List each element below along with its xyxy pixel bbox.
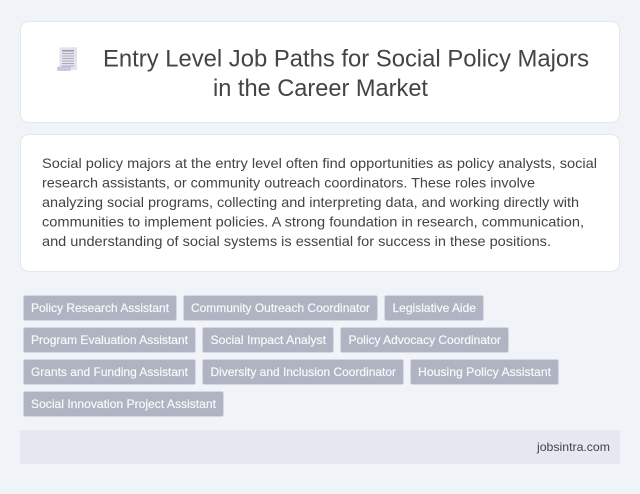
tag: Legislative Aide	[384, 296, 484, 320]
tag: Community Outreach Coordinator	[184, 296, 378, 320]
tag: Policy Advocacy Coordinator: Policy Advocacy Coordinator	[348, 333, 501, 347]
tag: Diversity and Inclusion Coordinator	[202, 360, 404, 384]
tag: Social Impact Analyst: Social Impact Analyst	[210, 333, 327, 347]
tag list	[24, 296, 558, 416]
heading: in the Career Market	[213, 75, 428, 102]
text block: summary paragraph: and understanding of social systems is essential for success in these positions.	[42, 233, 551, 249]
text block: summary paragraph: Social policy majors at the entry level often find opportunities as policy analysts, social	[42, 155, 597, 171]
footer bar	[20, 430, 620, 464]
panel: summary card	[20, 134, 620, 272]
text block: summary paragraph: research assistants, or community outreach coordinators. These roles involve	[42, 174, 535, 190]
tag: Program Evaluation Assistant: Program Evaluation Assistant	[31, 333, 189, 347]
tag: Policy Advocacy Coordinator	[340, 328, 508, 352]
heading	[103, 46, 589, 102]
tag: Legislative Aide: Legislative Aide	[392, 301, 476, 315]
tag: Housing Policy Assistant	[410, 360, 558, 384]
text block: summary paragraph: analyzing social programs, collecting and interpreting data, and working directly with	[42, 194, 579, 210]
tag: Community Outreach Coordinator: Community Outreach Coordinator	[191, 301, 370, 315]
tag: Policy Research Assistant	[24, 296, 176, 320]
tag: Policy Research Assistant: Policy Research Assistant	[31, 301, 170, 315]
tag: Social Impact Analyst	[202, 328, 334, 352]
panel: title card	[20, 22, 620, 122]
tag: Grants and Funding Assistant	[24, 360, 196, 384]
icon: document scroll	[57, 47, 78, 71]
text block: summary paragraph: communities to implement policies. A strong foundation in research, communication,	[42, 214, 584, 230]
tag: Grants and Funding Assistant: Grants and Funding Assistant	[31, 365, 189, 379]
tag: Diversity and Inclusion Coordinator: Diversity and Inclusion Coordinator	[210, 365, 396, 379]
tag: Program Evaluation Assistant	[24, 328, 196, 352]
text block: summary paragraph	[42, 155, 597, 249]
tag: Housing Policy Assistant: Housing Policy Assistant	[418, 365, 552, 379]
tag: Social Innovation Project Assistant	[24, 392, 224, 416]
tag: Social Innovation Project Assistant: Social Innovation Project Assistant	[31, 397, 217, 411]
heading: Entry Level Job Paths for Social Policy Majors	[103, 46, 589, 72]
footer text: site name: jobsintra.com	[536, 440, 610, 454]
